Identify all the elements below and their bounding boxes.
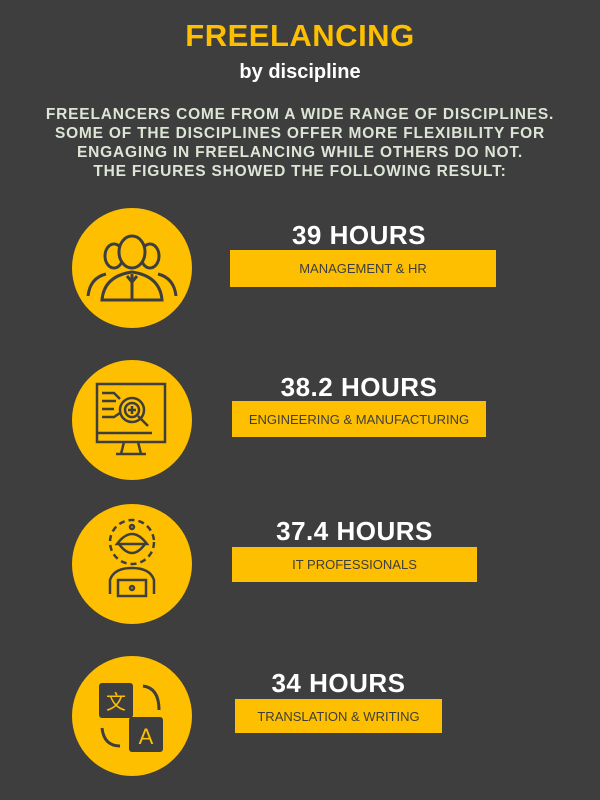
icon: translation: A — [139, 724, 154, 749]
bar: engineering & manufacturing — [232, 401, 486, 437]
icon: IT professional — [72, 504, 192, 624]
bar: engineering & manufacturing: ENGINEERING & MANUFACTURING — [249, 412, 469, 426]
value: 34 hours: 34 HOURS — [271, 668, 406, 698]
icon: translation — [72, 656, 192, 776]
icon: translation: 文 — [106, 686, 126, 715]
value: 38.2 hours: 38.2 HOURS — [281, 372, 437, 402]
icon: engineering monitor — [72, 360, 192, 480]
intro text: SOME OF THE DISCIPLINES OFFER MORE FLEXIBILITY FOR — [55, 125, 545, 142]
value: 37.4 hours: 37.4 HOURS — [276, 516, 433, 546]
intro text — [46, 106, 554, 180]
bar: translation & writing — [235, 699, 442, 733]
icon: management people — [72, 208, 192, 328]
subtitle: by discipline — [239, 61, 361, 83]
value: 39 hours: 39 HOURS — [292, 220, 426, 250]
bar: translation & writing: TRANSLATION & WRITING — [257, 708, 420, 724]
bar: management & hr: MANAGEMENT & HR — [299, 261, 427, 276]
bar: IT professionals — [232, 547, 477, 582]
title: FREELANCING — [185, 18, 415, 53]
intro text: FREELANCERS COME FROM A WIDE RANGE OF DISCIPLINES. — [46, 106, 554, 123]
bar: IT professionals: IT PROFESSIONALS — [292, 557, 417, 572]
intro text: ENGAGING IN FREELANCING WHILE OTHERS DO NOT. — [77, 144, 523, 161]
intro text: THE FIGURES SHOWED THE FOLLOWING RESULT: — [93, 163, 507, 180]
bar: management & hr — [230, 250, 496, 287]
